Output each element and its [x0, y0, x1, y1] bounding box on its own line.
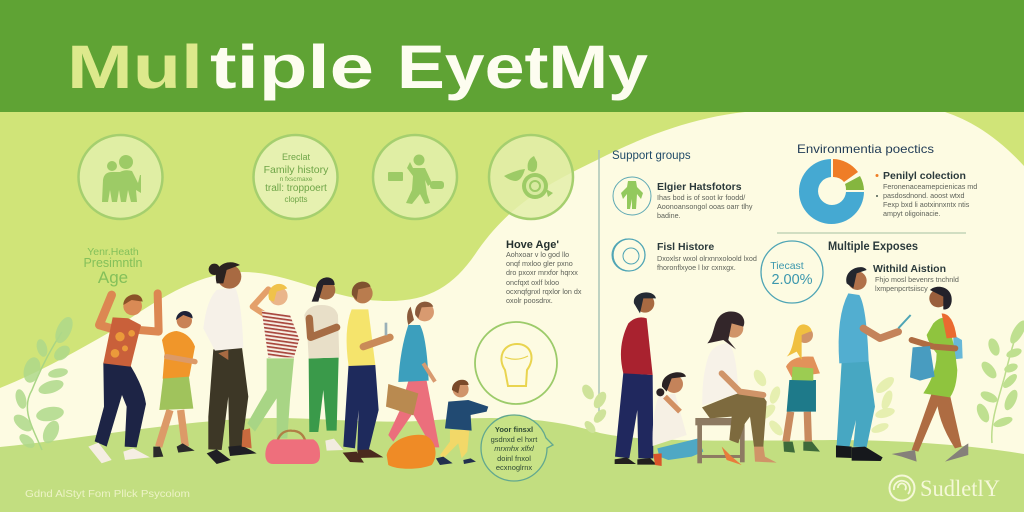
list item: Fisl Histore: fhoronflxyoe l lxr cxnxgx. — [657, 263, 736, 272]
speech bubble callout: doinl fnxol — [497, 454, 531, 463]
person 1: dancing woman — [88, 293, 159, 463]
legend: Penilyl colection: Feronenaceamepcienicas md — [883, 182, 977, 191]
legend: Penilyl colection: pasdosdnond. aoost wtxd — [883, 191, 965, 200]
list item: Elgier Hatsfotors — [613, 177, 753, 220]
person 6: man in yellow shirt — [343, 282, 390, 463]
stat circle: 2.00%: 2.00% — [771, 272, 813, 288]
pink duffel bag — [265, 431, 320, 464]
leaves: left plant — [11, 314, 76, 451]
girl in green top — [783, 324, 820, 453]
pale background leaves — [580, 368, 897, 438]
orange bag — [387, 435, 436, 469]
legend: Penilyl colection — [876, 170, 977, 218]
speech bubble callout — [481, 415, 553, 481]
text block: Withild Aistion: lxmpenpcrtsiiscy — [875, 284, 928, 293]
background: cream wave — [0, 112, 1024, 512]
title: EyetMy — [397, 33, 648, 101]
horizontal divider — [777, 232, 966, 234]
text circle: family history: cloptts — [284, 195, 308, 204]
text block: Hove Age: onqf mxloo gler pxno — [506, 259, 573, 268]
person 7: walking woman with bag — [386, 302, 439, 447]
text block: left age label: Age — [98, 268, 128, 287]
title — [67, 33, 648, 101]
text circle: family history: trall: troppoert — [265, 183, 327, 194]
text block: Hove Age: Hove Age' — [506, 239, 559, 251]
text block: Hove Age: oncfqxt oxlf lxloo — [506, 278, 559, 287]
text block: Withild Aistion: Withild Aistion — [873, 263, 946, 275]
man in blue tee — [836, 267, 911, 461]
icon: person carrying bags circle — [373, 135, 457, 219]
text block: Hove Age — [506, 239, 582, 305]
logo: SudletlY — [920, 476, 1000, 501]
icon: fruit and leaf circle — [489, 135, 573, 219]
list item: Elgier Hatsfotors: badine. — [657, 211, 681, 220]
heading: Support groups: Support groups — [612, 150, 691, 162]
seated girl on floor — [653, 372, 703, 466]
person 4: striped shirt woman — [242, 284, 299, 448]
text block: left age label: Yenr.Heath — [87, 246, 139, 258]
seated woman — [702, 311, 777, 465]
speech bubble callout: gsdnxd el hxrt — [491, 435, 538, 444]
legend: Penilyl colection: Penilyl colection — [883, 170, 966, 182]
person 5: woman in beige tee — [304, 277, 343, 451]
man in red sweater — [615, 292, 657, 465]
panel: four icon circles — [78, 135, 573, 219]
text circle: family history: Family history — [264, 164, 329, 176]
text block: Hove Age: dro pxoxr mrxfor hqrxx — [506, 268, 578, 277]
text block: Hove Age: ocxnqfgnxl rqxlor lon dx — [506, 287, 582, 296]
speech bubble callout: Yoor finsxl — [495, 425, 533, 434]
wooden stool — [695, 418, 745, 463]
list item: Fisl Histore — [612, 239, 757, 272]
list item: Elgier Hatsfotors: Ihas bod is of soot kr foodd/ — [657, 193, 745, 202]
child in navy jacket — [436, 380, 488, 465]
footer note: Gdnd AlStyt Fom Pllck Psycolom — [25, 489, 190, 500]
text circle: family history — [254, 135, 338, 219]
text circle: family history: Ereclat — [282, 152, 311, 162]
legend: Penilyl colection: Fexp bxd li aotxinnxntx ntis — [883, 200, 970, 209]
text block: Hove Age: oxolr poosdnx. — [506, 296, 553, 305]
stat circle: 2.00%: Tiecast — [770, 260, 804, 272]
group of people: left queue — [88, 262, 488, 469]
person 3: tall man in white shirt — [203, 262, 257, 464]
background: green ground — [0, 418, 1024, 512]
text block: Withild Aistion — [873, 263, 959, 293]
text block: left age label: Presimntln — [83, 256, 143, 270]
text block: left age label — [83, 246, 143, 287]
list item: Elgier Hatsfotors: Elgier Hatsfotors — [657, 181, 742, 193]
list item: Elgier Hatsfotors: Aoonoansongol ooas oarr tlhy — [657, 202, 753, 211]
list item: Fisl Histore: Fisl Histore — [657, 241, 714, 253]
title: Mul — [67, 33, 203, 101]
woman in green dress with bags — [892, 287, 968, 462]
title: tiple — [210, 33, 374, 101]
background: lime field — [0, 112, 1024, 512]
icon: family circle — [78, 135, 162, 219]
donut chart — [799, 159, 864, 224]
leaves: right plant — [974, 318, 1024, 443]
speech bubble callout: ecxnoglrnx — [496, 463, 532, 472]
title banner — [0, 0, 1024, 112]
person 2: child in orange — [153, 311, 195, 457]
speech bubble callout: mrxnhx xlfxl — [494, 444, 534, 453]
stat circle: 2.00% — [761, 241, 823, 303]
heading: Environmentia poectics: Environmentia poectics — [797, 142, 934, 156]
legend: Penilyl colection: ampyt oligoinacie. — [883, 209, 941, 218]
vertical divider — [598, 150, 600, 420]
lightbulb circle — [475, 322, 557, 404]
text block: Withild Aistion: Fhjo mosl bevenrs tnchnld — [875, 275, 959, 284]
group of people: right side — [615, 267, 968, 466]
text block: Hove Age: Aohxoar v lo god llo — [506, 250, 569, 259]
text circle: family history: n fxscmaxe — [280, 176, 313, 183]
heading: Multiple Exposes: Multiple Exposes — [828, 241, 918, 253]
list item: Fisl Histore: Dxoxlsr wxol olrxnnxoloold lxod — [657, 254, 757, 263]
